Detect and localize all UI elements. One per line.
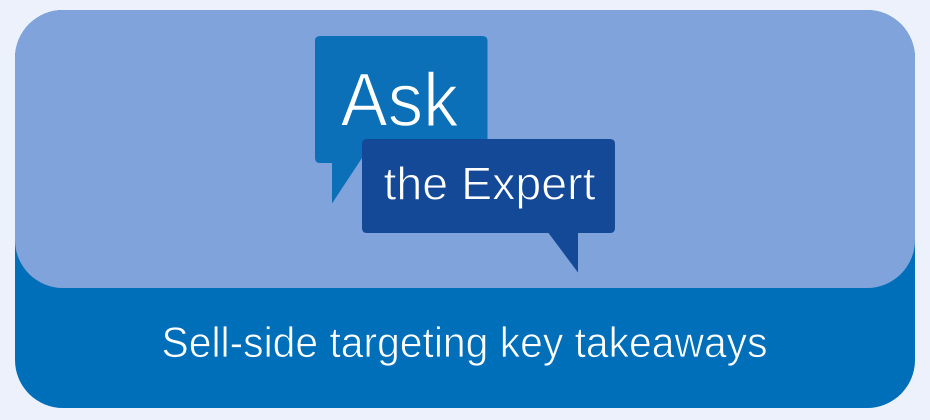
caption text: Sell-side targeting key takeaways xyxy=(162,319,768,367)
panel: top light blue card xyxy=(15,10,915,288)
icon: the Expert speech bubble xyxy=(362,139,615,272)
icon: Ask speech bubble xyxy=(315,36,488,204)
heading: the Expert: the Expert xyxy=(384,158,596,210)
heading: Ask: Ask xyxy=(340,58,459,143)
logo: Ask the Expert speech bubbles xyxy=(315,36,615,272)
